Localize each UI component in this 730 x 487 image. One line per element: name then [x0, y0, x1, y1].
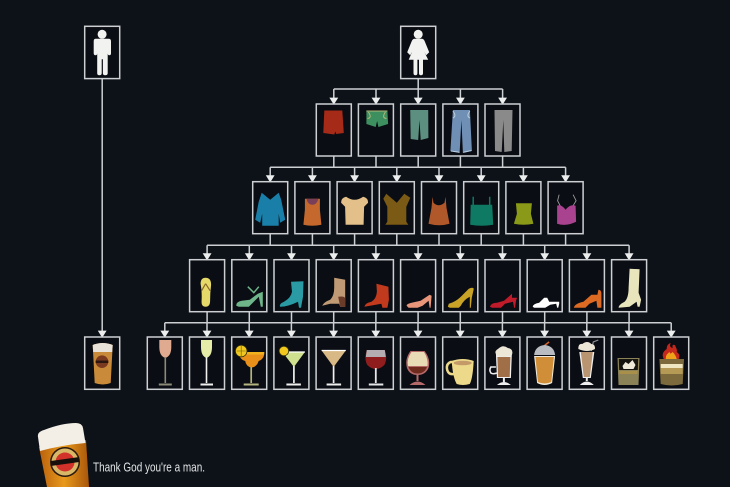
icon: salmon heel: [401, 260, 436, 312]
icon: teal trousers: [401, 104, 436, 156]
icon: olive tube top: [506, 182, 541, 234]
icon: red skirt: [316, 104, 351, 156]
icon: rust camisole: [422, 182, 456, 234]
icon: orange heel: [569, 260, 604, 312]
icon: tan martini: [316, 337, 351, 389]
connectors: woman to clothing tree: [161, 78, 675, 337]
icon: brown ruffled top: [379, 182, 414, 234]
logo badge: [50, 447, 80, 477]
icon: margarita: [232, 337, 267, 389]
icon: brandy snifter: [400, 337, 436, 389]
icon: orange tank top: [295, 182, 330, 234]
icon: yellow champagne flute: [190, 337, 224, 389]
icon: irish coffee: [485, 337, 520, 389]
icon: yellow heel: [443, 260, 478, 312]
connector: man to beer: [98, 78, 106, 337]
icon: pink champagne flute: [147, 337, 182, 389]
icon: purple halter top: [548, 182, 583, 234]
icon: blue long-sleeve top: [253, 182, 288, 234]
icon: beige blouse: [337, 182, 372, 234]
icon: red wine glass: [358, 337, 393, 389]
icon: tall latte: [569, 337, 604, 389]
logo: tilted beer glass with badge: [38, 423, 89, 487]
tagline: Thank God you're a man.: [93, 460, 205, 474]
icon: frappe: [527, 337, 562, 389]
icon: yellow flip-flop: [190, 260, 225, 312]
icon: grey trousers: [485, 104, 520, 156]
icon: coffee cup: [443, 337, 478, 389]
icon: blue flared jeans: [443, 104, 478, 156]
icon: woman: [401, 26, 436, 79]
icon: whisky on the rocks: [612, 337, 646, 389]
icon: green martini: [274, 337, 309, 389]
icon: green shorts: [358, 104, 393, 156]
icon: cream tall boot: [612, 260, 647, 312]
icon: green strappy top: [464, 182, 499, 234]
icon: green sandal: [232, 260, 267, 312]
icon: red heel: [485, 260, 520, 312]
icon: red boot: [358, 260, 393, 312]
icon: pint of beer: [85, 337, 120, 389]
icon: white heel: [527, 260, 562, 312]
icon: teal boot: [274, 260, 309, 312]
icon: man: [85, 26, 120, 79]
icon: flaming cocktail: [654, 337, 689, 389]
icon: tan boot: [316, 260, 351, 312]
